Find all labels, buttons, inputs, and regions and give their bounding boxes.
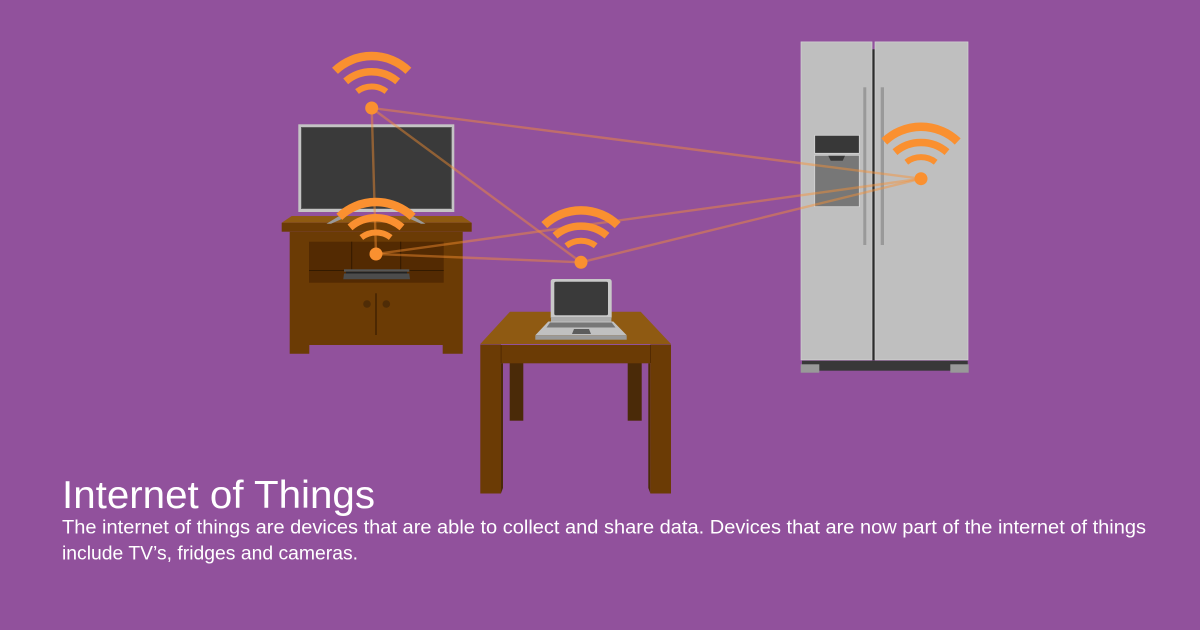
TV cabinet <box>282 216 472 354</box>
handles <box>863 87 884 245</box>
description text: include TV’s, fridges and cameras. <box>62 544 358 564</box>
connection lines <box>372 108 921 262</box>
water dispenser <box>815 135 859 207</box>
description text <box>62 517 1146 564</box>
laptop <box>535 279 627 340</box>
description text: The internet of things are devices that are able to collect and share data. Devices that are now part of the internet of things <box>62 517 1146 538</box>
icon: wifi on fridge <box>884 127 958 185</box>
icon: wifi above TV <box>335 56 408 114</box>
title: Internet of Things <box>62 474 375 517</box>
TV screen <box>298 124 454 212</box>
icon: wifi on cabinet <box>339 202 413 260</box>
table <box>480 312 671 494</box>
icon: wifi above laptop <box>544 210 618 269</box>
set-top box <box>343 269 410 279</box>
fridge <box>801 42 969 373</box>
TV stand <box>326 216 426 224</box>
